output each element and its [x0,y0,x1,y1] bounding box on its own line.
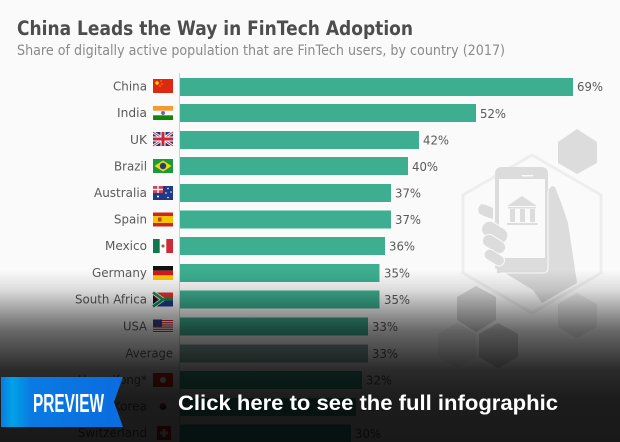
row: South Korea [74,398,386,416]
row: India: India [117,105,147,120]
icon: Germany flag [153,266,173,280]
row: Brazil: 40% [412,159,438,174]
row: Hong Kong: Hong Kong* [78,372,147,387]
row: Germany: 35% [384,266,410,280]
icon: Spain flag [153,212,173,226]
row: Average [126,344,398,362]
row: South Korea: South Korea [74,398,147,414]
axis line [179,73,180,442]
row: Switzerland: 30% [355,426,381,441]
row: Switzerland: Switzerland [78,425,147,440]
row: USA [123,318,398,336]
row: Mexico: Mexico [105,238,147,253]
icon: UK flag [153,132,173,146]
row: UK [130,131,449,149]
row: Australia: Australia [94,185,147,200]
icon: USA flag [153,320,173,334]
icon: Brazil flag [153,159,173,173]
row: China: China [113,78,147,94]
row: India: 52% [480,106,506,121]
row: USA: USA [123,318,147,334]
row: Switzerland [78,424,381,442]
row: Average: Average [126,346,173,360]
row: South Africa: 35% [384,292,410,307]
row: USA: 33% [372,319,398,334]
title: China Leads the Way in FinTech Adoption [17,17,413,40]
row: South Africa: South Africa [75,292,147,306]
row: Australia [94,184,421,202]
row: China: 69% [577,79,603,94]
row: Brazil: Brazil [114,158,147,174]
call to action: Click here to see the full infographic [178,391,558,415]
row: UK: 42% [423,132,449,148]
icon: Switzerland flag [157,426,171,440]
row: India [117,104,506,122]
icon: India flag [153,106,173,120]
row: Brazil [114,157,438,175]
illustration: hand holding phone in hexagons [438,129,601,368]
subtitle: Share of digitally active population that are FinTech users, by country (2017) [17,43,505,59]
row: Mexico: 36% [389,238,415,254]
row: Hong Kong: 32% [366,372,392,388]
dark preview overlay [0,270,620,442]
row: South Korea: 31% [360,399,386,414]
row: Average: 33% [372,346,398,361]
row: China [113,78,603,96]
row: South Africa [75,290,410,308]
row: Spain: Spain [114,212,147,226]
row: Spain [114,210,421,228]
row: Spain: 37% [395,212,421,227]
icon: South Korea flag [153,400,173,414]
row: Germany [92,264,410,282]
icon: Australia flag [153,186,173,200]
row: Mexico [105,237,415,255]
row: UK: UK [130,132,148,147]
row: Australia: 37% [395,186,421,200]
preview ribbon: PREVIEW [33,388,104,418]
preview ribbon [1,377,123,427]
row: Hong Kong [78,371,392,389]
icon: Mexico flag [153,239,173,253]
icon: China flag [153,79,173,93]
row: Germany: Germany [92,265,148,280]
icon: South Africa flag [153,292,173,306]
icon: Hong Kong flag [153,373,173,387]
